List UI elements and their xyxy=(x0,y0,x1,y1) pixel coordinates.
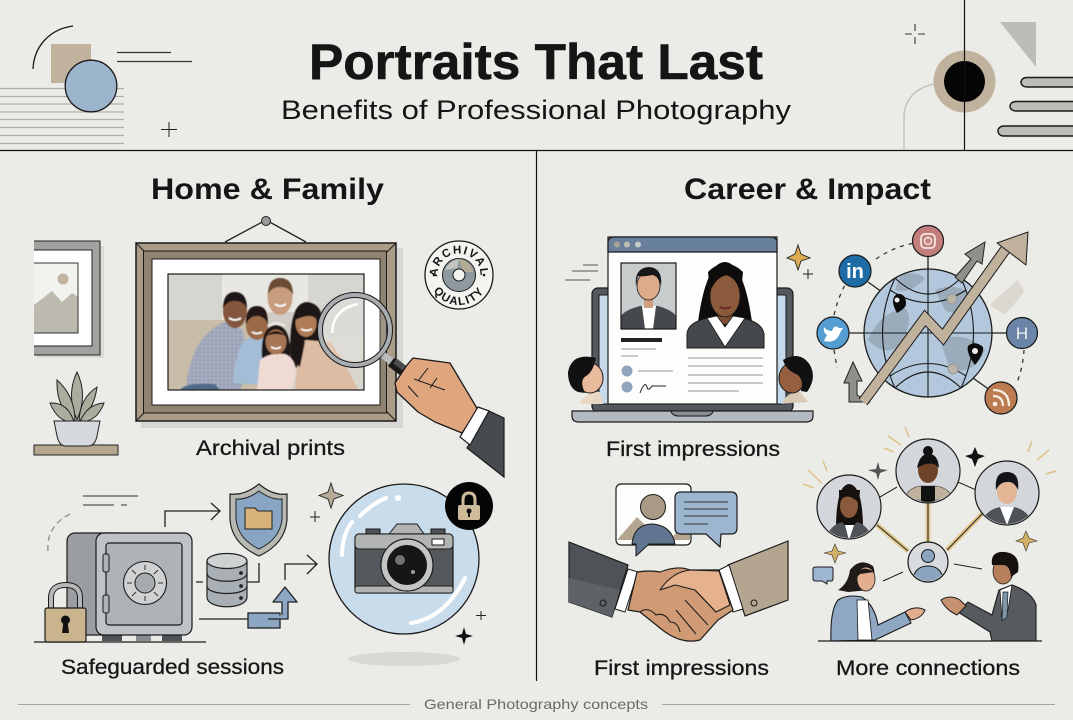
connecting arrows and blue arrow xyxy=(165,503,317,628)
badge text xyxy=(430,246,488,306)
left sleeve xyxy=(569,542,628,617)
left man xyxy=(186,322,248,390)
icon: twitter xyxy=(817,317,849,349)
smiles xyxy=(229,304,312,348)
icon: rss xyxy=(985,382,1017,414)
main picture frame with family photo xyxy=(136,243,403,428)
hands xyxy=(628,568,733,641)
header decoration left xyxy=(0,26,192,144)
icon: linkedin xyxy=(839,255,871,287)
badge text: QUALITY xyxy=(434,287,482,306)
caption: archival prints: Archival prints xyxy=(196,437,345,460)
caption: safeguarded sessions: Safeguarded sessions xyxy=(61,656,284,679)
right sleeve xyxy=(728,541,788,616)
heading: career and impact: Career & Impact xyxy=(684,173,931,206)
heading: home and family: Home & Family xyxy=(151,173,384,206)
family photo xyxy=(168,274,364,390)
center user xyxy=(908,542,948,582)
header decoration right xyxy=(904,22,1073,151)
caption: first impressions top: First impressions xyxy=(606,438,780,461)
magnifying glass and hand xyxy=(318,292,504,477)
chat bubble xyxy=(675,492,737,547)
database xyxy=(207,554,247,607)
globe with social icons and growth arrow xyxy=(817,226,1038,414)
shield with folder xyxy=(230,484,287,556)
woman portrait xyxy=(696,262,754,338)
small chat bubble xyxy=(813,567,833,584)
growth arrow xyxy=(863,250,1005,402)
archival quality badge xyxy=(425,241,493,309)
side picture frame xyxy=(34,241,104,358)
golden links xyxy=(877,502,983,551)
right viewer xyxy=(782,392,808,404)
icon: instagram xyxy=(912,226,944,256)
hanging wire xyxy=(225,216,306,242)
panel: career and impact xyxy=(565,173,1056,680)
gray arrows xyxy=(955,242,985,283)
small headshot xyxy=(621,263,676,329)
handshake with chat bubbles xyxy=(569,484,788,641)
back man xyxy=(266,311,296,350)
icon: linkedin: in xyxy=(846,261,864,283)
footer: General Photography concepts xyxy=(424,696,648,712)
connections network xyxy=(803,427,1056,641)
woman presenter xyxy=(831,562,925,641)
girl xyxy=(262,325,290,358)
laptop with profile page xyxy=(565,237,813,422)
caption: more connections: More connections xyxy=(836,657,1020,680)
icon: h network xyxy=(1006,318,1038,348)
plant on shelf xyxy=(34,372,118,455)
camera in glass bubble xyxy=(310,482,493,666)
boy xyxy=(233,337,264,385)
woman xyxy=(290,302,322,368)
person left xyxy=(817,475,881,540)
person right xyxy=(975,461,1039,525)
safe with padlock xyxy=(34,496,206,642)
sparkles xyxy=(824,447,1037,563)
panel: home and family xyxy=(34,173,505,679)
person top xyxy=(896,439,960,504)
left viewer xyxy=(580,392,603,404)
subtitle: Benefits of Professional Photography xyxy=(281,95,792,125)
globe xyxy=(864,269,992,397)
badge text: ARCHIVAL xyxy=(430,246,488,277)
man presenter xyxy=(941,552,1036,641)
photo card xyxy=(616,484,691,545)
rays xyxy=(803,427,1056,488)
title: Portraits That Last xyxy=(309,34,763,90)
icon: h network: H xyxy=(1016,324,1028,343)
sparkle xyxy=(787,245,810,270)
caption: first impressions bottom: First impressions xyxy=(594,657,769,680)
